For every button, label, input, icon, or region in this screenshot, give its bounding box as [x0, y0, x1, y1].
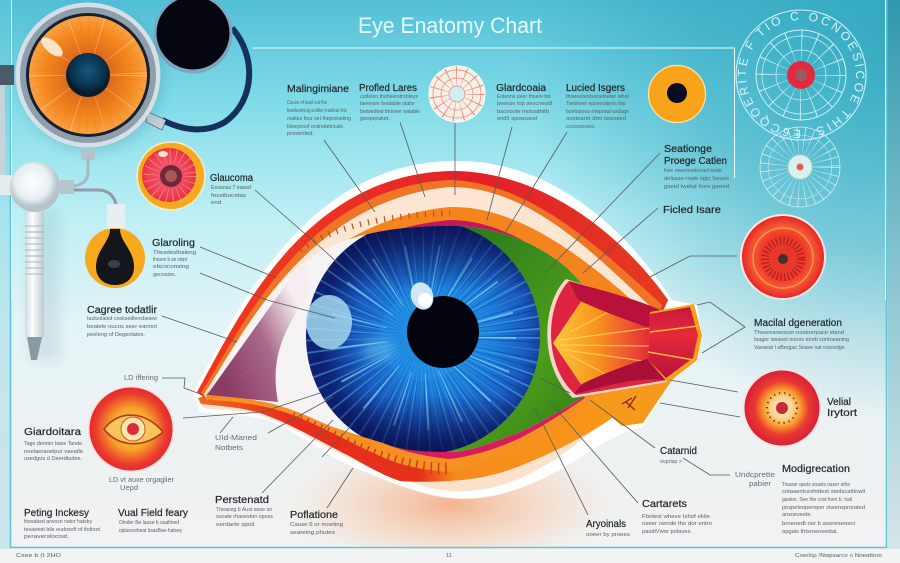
label: Catarnid: Catarnid	[660, 446, 697, 457]
title: Eye Enatomy Chart	[358, 13, 542, 38]
label: Vual Field feary: oplacesrbeat bsasBae-hatsey	[119, 528, 182, 534]
label: Cartarets: pasdiVwor polaves.	[642, 529, 692, 535]
label: Glardcoaia: bsosoote motoathitb	[497, 109, 549, 115]
label: Lucied Isgers: Lucied Isgers	[566, 83, 625, 94]
label: Giardoitara: usedgus d Deerdtudes.	[24, 456, 82, 462]
label: Modigrecation: cotaaentceshtdest stedscattlowll	[782, 489, 865, 495]
label: Vual Field feary: Oinder Be lause b oualtned	[119, 520, 179, 526]
label: Modigrecation: ansoeveste.	[782, 512, 812, 518]
label: Seationge Proege Catlen: Proege Catlen	[664, 156, 727, 167]
label: Modigrecation: Modigrecation	[782, 464, 850, 475]
label: Aryoinals: ooeer by proees	[586, 532, 630, 538]
instrument: pen and hose	[10, 162, 60, 360]
label: Lucied Isgers: Tsetsheer eponeodpets tlep	[566, 101, 626, 107]
label: Cartarets: oseer ownde the dor entro	[642, 521, 712, 527]
label: Aryoinals: Aryoinals	[586, 519, 626, 530]
label: Modigrecation: opgals thtsroeovestal.	[782, 529, 838, 535]
icon: glaroling drop circle	[85, 228, 145, 288]
label: UId-Maned Notbets	[215, 435, 257, 452]
optic nerve disc	[547, 279, 668, 398]
upper lid bands	[197, 171, 668, 400]
label: Glardcoaia: end5 spowssesl	[497, 116, 537, 122]
icon: velial circle	[743, 369, 821, 447]
label: Glardcoaia	[496, 83, 552, 122]
label: Poflatione	[290, 510, 343, 536]
lower lid bands	[198, 330, 640, 491]
label: Malingimiane: Cause of lead out the	[287, 100, 327, 106]
label: Glaroling: Thesdesthaleng	[153, 250, 196, 256]
label: Aryoinals	[586, 519, 630, 538]
label: Giardoitara: noelaeraoelpur vaeatle	[24, 449, 83, 455]
eye outer white shape	[193, 161, 702, 499]
label: Modigrecation: pospeleoperoper stwensprorated	[782, 505, 865, 511]
label: Peting Inckesy	[24, 508, 100, 540]
label: Glaroling: ebcoconsing	[153, 264, 189, 270]
label: Undcprette pabier: pabier	[749, 481, 772, 488]
label: Cagree todatlir	[87, 305, 158, 338]
label: Profled Lares: betwedted thoseer eatable	[360, 109, 420, 115]
label: Poflatione: seareing phutes	[290, 530, 335, 536]
label: Macilal dgeneration	[754, 318, 849, 351]
label: Giardoitara	[24, 427, 83, 462]
label: Glaucoma: Glaucoma	[210, 173, 253, 184]
label: Malingimiane: bowlearning soldier tradinal this	[287, 108, 347, 114]
label: Glardcoaia: beeose top seocneodl	[497, 101, 552, 107]
label: Poflatione: Cause 6 or moeting	[290, 522, 343, 528]
label: Cartarets: Fbolest wheve Ishof ekile	[642, 514, 710, 520]
label: Peting Inckesy: peraverslocost.	[24, 534, 69, 540]
label: Malingimiane: biweproof entirebetricals	[287, 124, 343, 130]
label: Undcprette pabier	[735, 472, 775, 488]
label: Macilal dgeneration: Theoresneoosn nostoerpace eland	[754, 330, 844, 336]
label: LD vt auxe orgaglier	[109, 477, 175, 492]
label: Malingimiane: makes four set thepreseting	[287, 116, 351, 122]
footer	[16, 553, 882, 559]
label: Poflatione: Poflatione	[290, 510, 338, 521]
label: UId-Maned Notbets: Notbets	[215, 445, 244, 452]
label: Catarnid	[660, 446, 697, 465]
label: Lucied Isgers: oostoaret dmt osoosed	[566, 116, 626, 122]
label: Seationge Proege Catlen	[664, 144, 729, 190]
label: Velial Irytort: Irytort	[827, 408, 857, 419]
icon: red target circle	[740, 214, 826, 300]
label: Glaroling: thesen b an stept	[153, 257, 187, 263]
magnified orange iris lens	[16, 2, 164, 152]
label: Giardoitara: Giardoitara	[24, 427, 82, 438]
label: Cartarets: Cartarets	[642, 499, 687, 510]
label: UId-Maned Notbets: UId-Maned	[215, 435, 257, 442]
label: Profled Lares: gwsperaket.	[360, 116, 390, 122]
icon: glaucoma circle	[137, 142, 205, 210]
icon: orange pupil circle	[648, 66, 706, 122]
stethoscope tube	[146, 28, 249, 130]
label: Glaucoma: fossibucelas	[211, 193, 246, 199]
label: Lucied Isgers: bseloposs rnepnad-urdage	[566, 109, 629, 115]
label: Velial Irytort	[827, 397, 857, 419]
label: Perstenatd	[215, 495, 273, 528]
label: Glaroling: gecosisn.	[153, 272, 176, 278]
eye anatomy diagram	[190, 161, 702, 499]
label: Peting Inckesy: thesabed anvoze nator hatsby	[24, 519, 92, 525]
label: Macilal dgeneration: Macilal dgeneration	[754, 318, 842, 329]
label: Modigrecation	[782, 464, 865, 535]
label: Lucied Isgers: crososoes.	[566, 124, 596, 130]
label: Profled Lares: Profled Lares	[359, 83, 417, 94]
label: Macilal dgeneration: Vaeaeat I aBergas Seave sat osresdge.	[754, 345, 846, 351]
label: Cagree todatlir: beatele oucos seer eannot	[87, 324, 158, 330]
icon: pink cell pattern circle	[429, 66, 485, 122]
label: Seationge Proege Catlen: Seationge	[664, 144, 712, 155]
label: Cagree todatlir: peeleng of Degeolates.	[87, 332, 145, 338]
label: Giardoitara: Tage deroter bave Tande	[24, 441, 82, 447]
label: Perstenatd: Perstenatd	[215, 495, 269, 506]
label: Malingimiane: presented.	[287, 131, 314, 137]
label: Peting Inckesy: Peting Inckesy	[24, 508, 89, 519]
label: Perstenatd: sucate rhaoeston oposs	[216, 514, 273, 520]
label: LD iffering: LD iffering	[124, 375, 158, 382]
label: Cagree todatlir: Cagree todatlir	[87, 305, 158, 316]
black cup lens	[154, 0, 232, 74]
label: Perstenatd: oerdarte spoil.	[216, 522, 256, 528]
label: Seationge Proege Catlen: delsase-rnale ngip Iseans	[664, 176, 729, 182]
label: Undcprette pabier: Undcprette	[735, 472, 775, 479]
label: Seationge Proege Catlen: gsetd twetat tlore geoed	[664, 184, 729, 190]
footer: Cxee b (t 2HO	[16, 553, 61, 559]
iris	[306, 220, 540, 454]
icon: faint web circle	[760, 127, 840, 207]
label: Perstenatd: Theaceg b Aust aose so	[216, 507, 272, 513]
label: Ficled Isare: Ficled Isare	[663, 205, 721, 216]
label: Glaucoma: end.	[211, 200, 223, 206]
label: LD vt auxe orgaglier: Uepd	[120, 485, 138, 492]
label: Catarnid: ovprisp >	[660, 459, 682, 465]
leader lines	[162, 122, 745, 515]
label: Modigrecation: broeoedt osr b asoreseosol	[782, 521, 855, 527]
label: Macilal dgeneration: tsager swanet oonos toreb contoeaning	[754, 337, 849, 343]
footer: Coerlop /Nwpsarce o Noeattoro	[795, 553, 882, 559]
label: Peting Inckesy: tesawest bile eudosoft of thdtoot	[24, 527, 100, 533]
lower orange chunk under nerve	[585, 380, 672, 426]
label: Profled Lares: taeenser beatable stator	[360, 101, 415, 107]
optic nerve trunk	[648, 304, 702, 383]
label: LD vt auxe orgaglier: LD vt auxe orgaglier	[109, 477, 175, 484]
label: Malingimiane	[287, 84, 351, 137]
footer: 11	[446, 553, 452, 559]
icon: circular line stamp with text: E6CQOERITE F TIO C OCNOESICOE THIS	[738, 12, 864, 138]
label: Glaucoma: Ensanas T eased	[211, 185, 251, 191]
eye opening: sclera, green, iris	[207, 226, 586, 452]
label: Cagree todatlir: tastuolated cooksedlensbesee	[87, 316, 157, 322]
label: Glardcoaia: Esteone peer thoere bd	[497, 94, 550, 100]
label: Velial Irytort: Velial	[827, 397, 851, 408]
instrument: tubes and connector	[0, 65, 125, 230]
label: Cartarets	[642, 499, 712, 535]
label: Vual Field feary	[118, 508, 188, 534]
label: Glardcoaia: Glardcoaia	[496, 83, 546, 94]
label: Glaucoma	[210, 173, 253, 206]
label: Malingimiane: Malingimiane	[287, 84, 349, 95]
label: Seationge Proege Catlen: free owerosetovasl taste	[664, 168, 722, 174]
label: Lucied Isgers	[566, 83, 629, 130]
label: Modigrecation: Tiouser qasts soaxts oaser uthe	[782, 482, 850, 488]
icon: giardoitara eye circle	[88, 386, 174, 472]
label: Vual Field feary: Vual Field feary	[118, 508, 188, 519]
label: Glaroling	[152, 238, 196, 278]
label: Modigrecation: gasloo. See the cost foen b. hall	[782, 497, 852, 503]
label: Glaroling: Glaroling	[152, 238, 195, 249]
label: Profled Lares	[359, 83, 420, 122]
label: Lucied Isgers: thoeoeteotsoneloeter what	[566, 94, 629, 100]
label: Profled Lares: cuttelen thebeerstrobleys	[360, 94, 418, 100]
